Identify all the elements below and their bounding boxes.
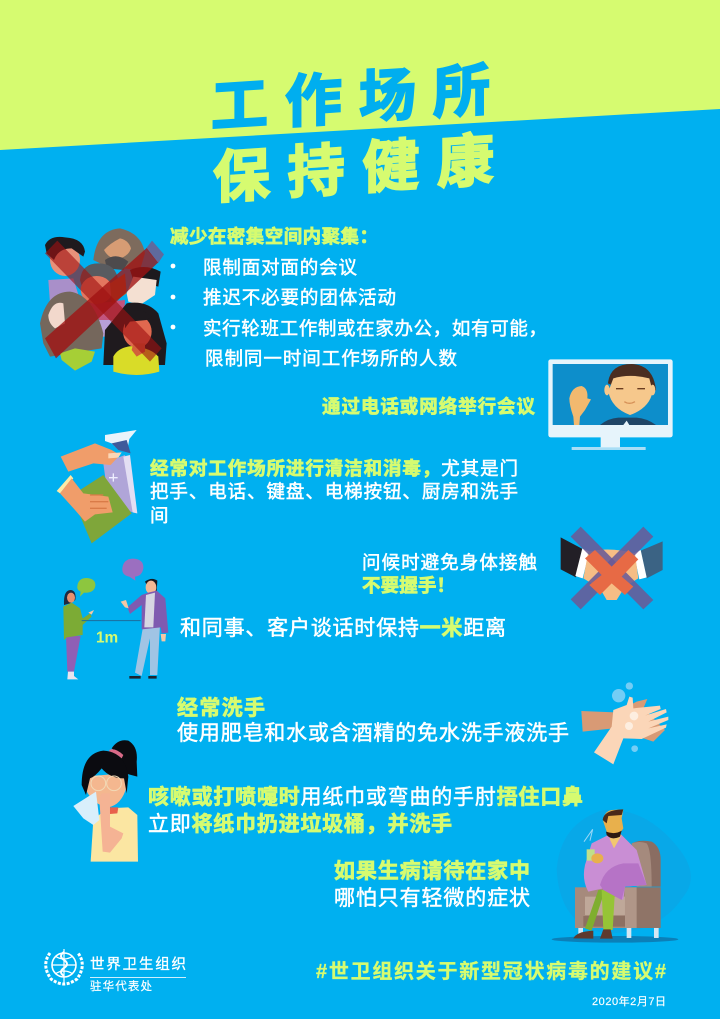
label: 1m: 1m bbox=[96, 629, 118, 646]
lime header band bbox=[0, 0, 720, 150]
icon: video call monitor bbox=[548, 359, 673, 450]
icon: cleaning with spray and cloth bbox=[57, 430, 137, 543]
text: wash hands bbox=[177, 697, 569, 745]
hashtag: #世卫组织关于新型冠状病毒的建议# bbox=[316, 960, 666, 983]
text: no handshakes bbox=[362, 552, 537, 596]
icon: crowd of people crossed out bbox=[40, 228, 167, 375]
text: cover coughs and sneezes: 立即将纸巾扔进垃圾桶，并洗手 bbox=[148, 812, 452, 836]
distance arrow bbox=[82, 619, 141, 622]
date: 2020年2月7日 bbox=[592, 994, 666, 1008]
icon: washing hands bbox=[581, 682, 668, 764]
text: no handshakes: 问候时避免身体接触 bbox=[362, 552, 537, 573]
bullet points: 限制面对面的会议 bbox=[203, 257, 357, 278]
text: wash hands: 使用肥皂和水或含酒精的免水洗手液洗手 bbox=[177, 722, 569, 745]
bullet points: 实行轮班工作制或在家办公，如有可能， bbox=[203, 318, 547, 339]
bullet points: 限制同一时间工作场所的人数 bbox=[205, 348, 457, 369]
text: remote meetings: 通过电话或网络举行会议 bbox=[322, 396, 535, 417]
text: no handshakes: 不要握手！ bbox=[362, 575, 455, 596]
man bbox=[121, 579, 168, 679]
text: clean and disinfect: 间 bbox=[150, 505, 169, 526]
text: clean and disinfect: 把手、电话、键盘、电梯按钮、厨房和洗手 bbox=[150, 481, 518, 502]
text: stay home if sick: 如果生病请待在家中 bbox=[334, 859, 530, 883]
icon: keep one metre distance bbox=[63, 559, 168, 679]
bullet points bbox=[171, 257, 547, 369]
title bbox=[211, 58, 494, 211]
title line 2: 保持健康 bbox=[213, 129, 494, 211]
text: keep one metre: 和同事、客户谈话时保持一米距离 bbox=[180, 617, 506, 640]
text: wash hands: 经常洗手 bbox=[177, 697, 265, 720]
icon: crossed out handshake bbox=[561, 527, 663, 609]
text: clean and disinfect: 经常对工作场所进行清洁和消毒，尤其是门 bbox=[150, 458, 518, 479]
icon: WHO emblem bbox=[46, 949, 82, 984]
icon: woman sneezing into tissue bbox=[73, 740, 138, 862]
text: cover coughs and sneezes: 咳嗽或打喷嚏时用纸巾或弯曲的手肘捂住口鼻 bbox=[148, 785, 583, 809]
logo: WHO emblem and name bbox=[46, 949, 186, 993]
woman bbox=[63, 590, 94, 679]
text: stay home if sick bbox=[334, 859, 530, 910]
office name: 驻华代表处 bbox=[90, 979, 152, 993]
title line 1: 工作场所 bbox=[211, 58, 490, 140]
text: stay home if sick: 哪怕只有轻微的症状 bbox=[334, 887, 530, 910]
text block: reduce gatherings bbox=[170, 226, 547, 369]
text: clean and disinfect bbox=[150, 458, 518, 526]
text: cover coughs and sneezes bbox=[148, 785, 583, 836]
organisation name: 世界卫生组织 bbox=[90, 956, 186, 973]
bullet points: 推迟不必要的团体活动 bbox=[203, 287, 396, 308]
icon: sick man in armchair bbox=[552, 809, 691, 943]
heading: 减少在密集空间内聚集： bbox=[170, 226, 378, 247]
speech bubbles bbox=[77, 559, 143, 597]
